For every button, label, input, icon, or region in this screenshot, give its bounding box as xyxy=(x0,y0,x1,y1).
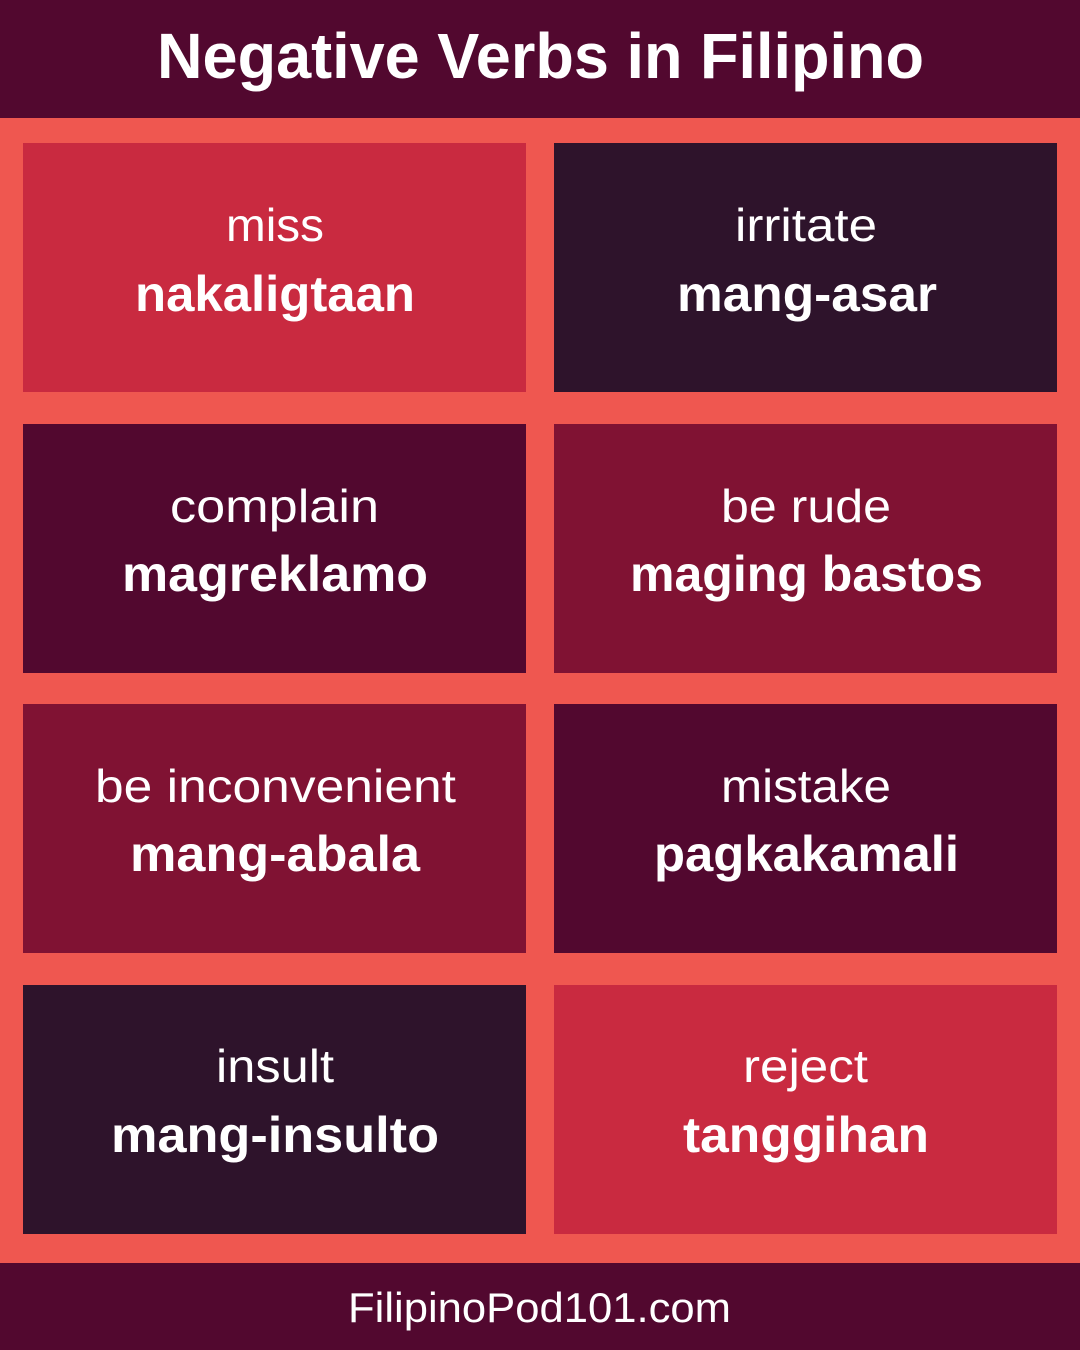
panel: complain: complain xyxy=(170,480,379,532)
footer: website band xyxy=(0,1263,1080,1350)
header: title band xyxy=(0,0,1080,118)
panel: mistake: mistake xyxy=(721,760,891,812)
panel: reject: tanggihan xyxy=(683,1107,929,1163)
panel: complain: magreklamo xyxy=(122,546,428,602)
panel: mistake: pagkakamali xyxy=(654,826,959,882)
panel: irritate: mang-asar xyxy=(677,266,937,322)
panel: be inconvenient: mang-abala xyxy=(130,826,421,882)
panel: miss: miss xyxy=(226,199,324,251)
panel: miss: nakaligtaan xyxy=(135,266,415,322)
footer: website band: FilipinoPod101.com xyxy=(348,1284,731,1331)
panel: be rude xyxy=(554,424,1057,673)
panel: miss xyxy=(23,143,526,392)
panel: insult: mang-insulto xyxy=(111,1107,439,1163)
panel: insult: insult xyxy=(216,1040,334,1092)
panel: be rude: maging bastos xyxy=(630,546,983,602)
panel: irritate xyxy=(554,143,1057,392)
panel: be rude: be rude xyxy=(721,480,891,532)
panel: irritate: irritate xyxy=(735,199,877,251)
title: Negative Verbs in Filipino xyxy=(157,20,924,92)
panel: be inconvenient: be inconvenient xyxy=(95,760,456,812)
panel: be inconvenient xyxy=(23,704,526,953)
panel: mistake xyxy=(554,704,1057,953)
panel: complain xyxy=(23,424,526,673)
panel: reject xyxy=(554,985,1057,1234)
panel: reject: reject xyxy=(743,1040,868,1092)
panel: insult xyxy=(23,985,526,1234)
